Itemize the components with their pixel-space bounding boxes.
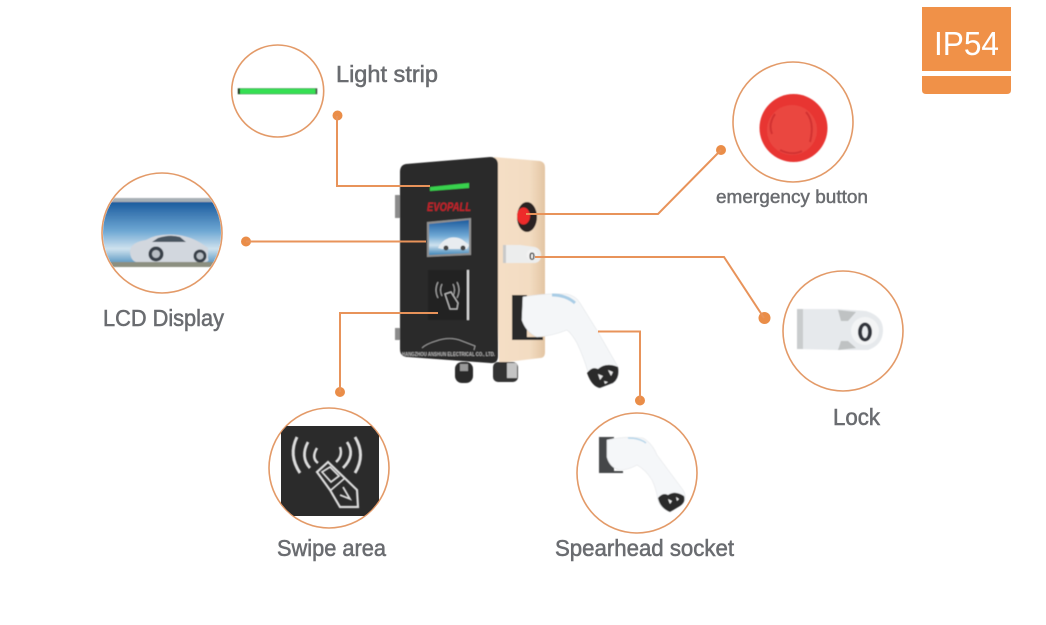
lock on charger: 0 <box>529 251 535 263</box>
callout: swipe area <box>269 313 438 561</box>
swipe detail icon <box>281 426 379 516</box>
callout: LCD display: LCD Display <box>103 305 224 331</box>
LCD on charger <box>427 218 471 257</box>
charger mounting brackets <box>395 195 400 340</box>
callout: spearhead socket: Spearhead socket <box>555 535 735 561</box>
callout: lock: Lock <box>833 404 880 430</box>
light strip detail <box>238 88 317 94</box>
callout: emergency button <box>526 62 868 214</box>
charger front panel <box>400 157 498 363</box>
charger side panel <box>494 157 545 363</box>
badge: IP54: IP54 <box>934 25 999 62</box>
callout: swipe area: Swipe area <box>277 535 386 561</box>
charger cable glands <box>455 362 518 383</box>
swipe area on charger <box>428 270 469 320</box>
charger unit <box>395 157 618 388</box>
lock on charger <box>503 245 541 263</box>
callout: spearhead socket <box>555 332 735 561</box>
callout: light strip: Light strip <box>336 61 438 87</box>
plug detail <box>599 437 685 512</box>
charger footer logo: HANGZHOU ANSHUN ELECTRICAL CO., LTD. <box>402 352 496 358</box>
callout: LCD display <box>102 173 426 331</box>
callout: light strip <box>232 45 438 186</box>
brand logo: EVOPALL <box>427 200 471 214</box>
light strip on charger <box>430 183 469 191</box>
callout: lock <box>535 257 903 430</box>
LCD detail photo <box>102 198 222 267</box>
connector socket and plug <box>512 294 618 388</box>
emergency button detail <box>760 94 828 162</box>
charger footer logo <box>402 338 496 358</box>
badge: IP54 <box>922 7 1011 94</box>
emergency button on charger <box>517 202 537 232</box>
lock detail <box>797 309 883 350</box>
callout: emergency button: emergency button <box>716 187 868 207</box>
